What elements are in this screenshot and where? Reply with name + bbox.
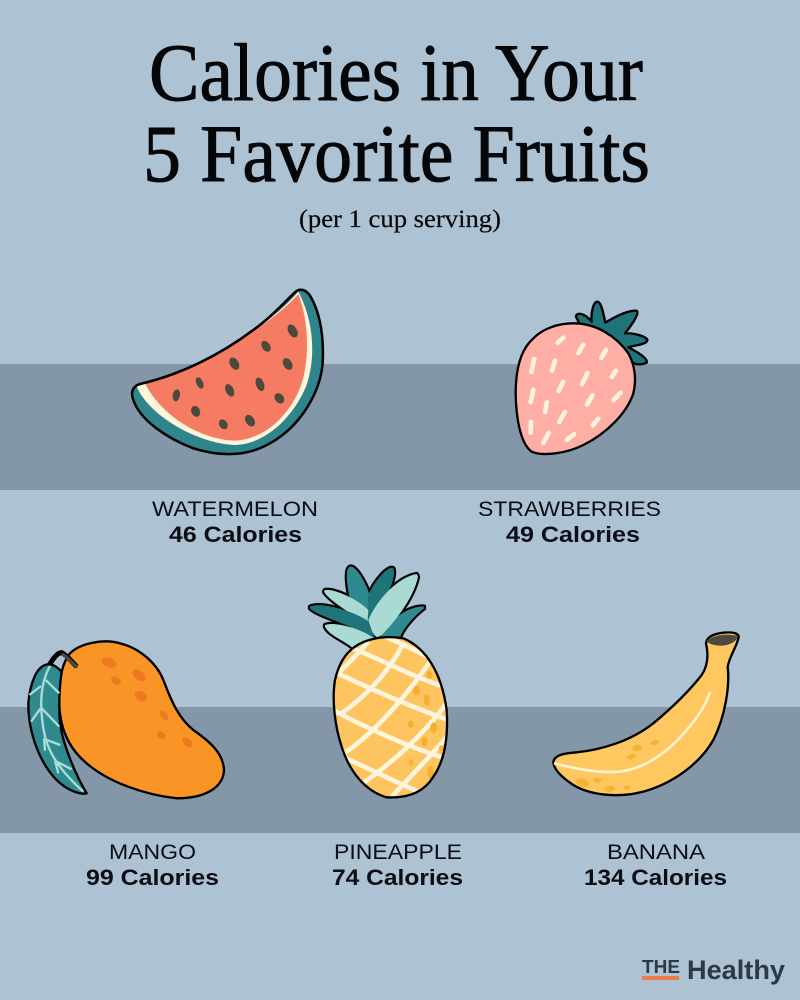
label: watermelon: WATERMELON bbox=[152, 497, 318, 521]
label: banana: 134 Calories bbox=[584, 865, 727, 890]
icon: strawberry bbox=[516, 302, 647, 454]
icon: watermelon bbox=[132, 290, 323, 454]
logo: The Healthy bbox=[642, 955, 785, 985]
label: watermelon: 46 Calories bbox=[169, 522, 302, 547]
icon: mango bbox=[28, 641, 224, 798]
label: watermelon bbox=[152, 497, 318, 547]
label: pineapple bbox=[332, 840, 463, 890]
icon: pineapple bbox=[310, 567, 450, 797]
label: strawberries bbox=[478, 497, 661, 547]
label: mango: 99 Calories bbox=[86, 865, 219, 890]
title: 5 Favorite Fruits bbox=[143, 108, 650, 199]
label: strawberries: 49 Calories bbox=[506, 522, 640, 547]
title: Calories in Your bbox=[149, 27, 643, 118]
title bbox=[143, 27, 650, 199]
label: strawberries: STRAWBERRIES bbox=[478, 497, 661, 521]
label: pineapple: PINEAPPLE bbox=[334, 840, 462, 864]
subtitle: (per 1 cup serving) bbox=[299, 206, 501, 233]
label: mango bbox=[86, 840, 219, 890]
label: banana bbox=[584, 840, 727, 890]
label: banana: BANANA bbox=[607, 840, 706, 864]
logo: The Healthy: Healthy bbox=[687, 955, 785, 985]
label: mango: MANGO bbox=[109, 840, 196, 864]
logo: The Healthy: THE bbox=[642, 957, 680, 977]
icon: banana bbox=[553, 632, 739, 795]
label: pineapple: 74 Calories bbox=[332, 865, 463, 890]
